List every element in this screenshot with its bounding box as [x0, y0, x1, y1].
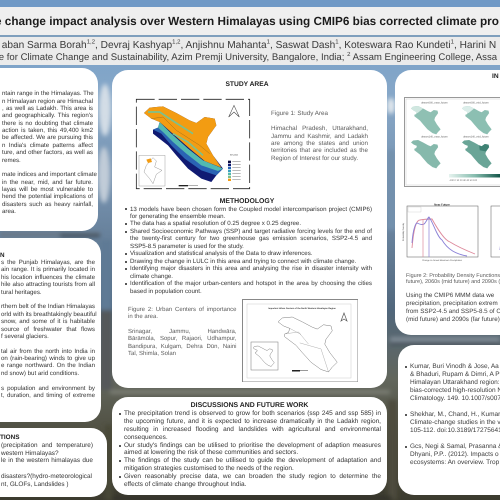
region text: f several glaciers.	[1, 333, 49, 340]
references list: Climate-change studies in the v	[410, 419, 500, 426]
study area elevation map	[136, 98, 250, 190]
region text: his location influences the climate	[1, 274, 95, 281]
figure 1 text: Jammu and Kashmir, and Ladakh	[271, 133, 368, 140]
probability density plot: Probability Density	[402, 222, 405, 241]
authors line: aban Sarma Borah1,2, Devraj Kashyap1,2, Anjishnu Mahanta1, Saswat Dash1, Koteswara Rao Kundeti1, Harini N	[2, 40, 496, 51]
discussion list: The precipitation trend is observed to grow for both scenarios (ssp 245 and ssp 585) in	[124, 410, 381, 417]
probability density plot	[402, 202, 500, 262]
introduction text: hend the potential implications of	[2, 193, 93, 200]
introduction text: layas will be most vulnerable to	[2, 186, 93, 193]
discussion list: The findings of the study can be utilised to guide the development of adaptation and	[124, 457, 381, 464]
introduction text: disasters such as heavy rainfall,	[2, 201, 93, 208]
panel: study area and methodology	[112, 70, 387, 388]
figure 1 text	[271, 110, 368, 162]
results text: Using the CMIP6 MMM data we	[406, 292, 494, 299]
figure 2 text: Srinagar, Jammu, Handwāra,	[128, 329, 236, 335]
methodology list: Visualization and statistical analysis of the Data to draw inferences.	[130, 250, 312, 257]
references list: Shekhar, M., Chand, H., Kumar	[410, 411, 500, 418]
region text: nd snow) but arid conditions.	[1, 370, 79, 377]
authors bar	[0, 37, 500, 65]
region text: on (rain-bearing) winds to give up	[1, 355, 95, 362]
region heading: N	[0, 252, 5, 259]
panel: results	[395, 70, 500, 335]
introduction text: in the near, mid, and far future.	[2, 179, 93, 186]
discussion list: consequences.	[124, 434, 168, 441]
panel: research questions	[0, 428, 107, 497]
heading: results: IN	[492, 72, 499, 80]
discussion list: Given reasonably precise data, we can broaden the study region to determine the	[124, 473, 381, 480]
questions text: le in the western himalayas due	[1, 457, 93, 464]
questions text	[1, 442, 93, 488]
figure 1 text: Himachal Pradesh, Uttarakhand,	[271, 125, 368, 132]
region text: hile also attracting tourists from all	[1, 281, 95, 288]
discussion list: the upcoming future, and it is expected to increase dramatically in the Ladakh region,	[124, 418, 381, 425]
figure 1 text: Figure 1: Study Area	[271, 110, 328, 117]
region text: t, duration, and timing of extreme	[1, 392, 95, 399]
region text: orld with its breathtakingly beautiful	[1, 311, 97, 318]
header: top blue band	[0, 0, 500, 8]
precipitation change maps: ukesm245_mid_future	[463, 136, 489, 138]
precipitation change maps: ukesm585_near_future	[421, 102, 448, 104]
introduction text: mate indices and important climate	[2, 171, 97, 178]
introduction text: n Himalayan region are Himachal	[2, 98, 93, 105]
precipitation change maps: ukesm245_near_future	[421, 136, 448, 138]
methodology list: based in population count.	[130, 288, 202, 295]
affiliations line: e for Climate Change and Sustainability, Azim Premji University, Bangalore, India; 2 Assam Engineering College, Assa	[0, 51, 497, 62]
discussion list: effects of climate change throughout India.	[124, 481, 246, 488]
probability density plot: Change in Annual Maximum Precipitation	[422, 259, 463, 262]
panel: region description	[0, 238, 101, 422]
references list: Dhyani, P.P.. (2012). Impacts o	[410, 451, 499, 458]
results text	[406, 292, 500, 323]
figure 1 text: territories that are included as the	[271, 147, 368, 154]
references list: Kumar, Buri Vinodh & Jose, Aa	[410, 363, 499, 370]
questions text: disasters?(hydro-meteorological	[1, 473, 92, 480]
figure 1 text: Region of Interest for our study.	[271, 155, 358, 162]
urban centers map: Important Urban Centers of the North Western Himalayan Region	[268, 307, 336, 310]
figure 1 text: are among the states and union	[271, 140, 368, 147]
methodology list: SSP5-8.5 parameter is used for the study.	[130, 243, 244, 250]
introduction text	[2, 90, 97, 215]
figure caption: Figure 2: Probability Density Functions	[406, 273, 500, 279]
introduction text: and geographically. This region's	[2, 112, 93, 119]
region text: s population and environment by	[1, 385, 95, 392]
introduction text: ntain range in the Himalayas. The	[2, 90, 94, 97]
header divider	[0, 35, 500, 37]
references list: bias-corrected high-resolution N	[410, 387, 500, 394]
discussion list: Our study's findings can be utilised to prioritise the development of adaption measures	[124, 442, 381, 449]
urban centers map	[242, 299, 358, 382]
results text: precipitation, precipitation extrem	[406, 300, 498, 307]
panel: introduction	[0, 68, 98, 231]
introduction text: remes.	[2, 157, 21, 164]
introduction text: action is taken, this 49,400 km2	[2, 127, 93, 134]
references list: 105-112. doi:10.3189/17275641	[410, 427, 500, 434]
questions text: (precipitation and temperature)	[1, 442, 93, 449]
methodology list: Identification of the major urban-centers and hotspot in the area by choosing the cities	[130, 280, 372, 287]
discussion list: mitigation strategies customised to the needs of the region.	[124, 465, 294, 472]
methodology list: Drawing the change in LULC in this area and trying to connect with climate change.	[130, 258, 356, 265]
region text	[1, 259, 97, 399]
region text: source of freshwater that flows	[1, 326, 95, 333]
questions text: nt, GLOFs, Landslides )	[1, 481, 68, 488]
title: e change impact analysis over Western Himalayas using CMIP6 bias corrected climate pro	[0, 15, 499, 28]
introduction text: ture, and other factors, as well as	[2, 149, 93, 156]
discussion list: resulting in increased flooding and landslides with agricultural and environmental	[124, 426, 381, 433]
figure 2 text	[128, 306, 236, 357]
probability density plot: Near Future	[434, 202, 450, 206]
references list: Climatology. 149. 10.1007/s007	[410, 395, 500, 402]
references list	[405, 363, 500, 466]
heading: study area: STUDY AREA	[225, 81, 269, 88]
title bar	[0, 7, 500, 35]
region text: e range northward. On the Indian	[1, 362, 95, 369]
references list: Himalayan Uttarakhand region:	[410, 379, 500, 386]
panel: references	[398, 345, 500, 495]
methodology list: for generating the ensemble mean.	[130, 213, 225, 220]
region text: tural heritages.	[1, 289, 42, 296]
questions text: western Himalayas?	[1, 450, 59, 457]
results text: (mid future) and 2090s (far future)	[406, 316, 500, 323]
figure 2 text: Tal, Shimla, Solan	[128, 351, 176, 357]
region text: tal air from the north into India in	[1, 348, 95, 355]
questions heading: TIONS	[0, 434, 20, 440]
heading: discussions: DISCUSSIONS AND FUTURE WORK	[191, 402, 308, 409]
introduction text: area.	[2, 208, 16, 215]
methodology list: Shared Socioeconomic Pathways (SSP) and target radiative forcing levels for the end of	[130, 228, 372, 235]
references list: & Bhaduri, Rupam & Dimri, A P	[410, 371, 500, 378]
figure caption	[406, 273, 500, 285]
references list: Gcs, Negi & Samal, Prasanna &	[410, 443, 500, 450]
region text: s the Punjab Himalayas, are the	[1, 259, 95, 266]
panel: discussions and future work	[112, 397, 387, 495]
methodology list: The data has a spatial resolution of 0.25 degree x 0.25 degree.	[130, 220, 301, 227]
figure 2 text: Bārāmūla, Sopur, Rajaori, Udhampur,	[128, 336, 236, 342]
methodology list: Identifying major disasters in this area and analysing the rise in disaster intensity with	[130, 265, 372, 272]
methodology list: the twenty-first century for two greenhouse gas emission scenarios, SSP2-4.5 and	[130, 235, 372, 242]
precipitation change maps	[404, 97, 500, 187]
introduction text: be affected. We are pursuing this	[2, 134, 93, 141]
introduction text: n India's climate patterns affect	[2, 142, 93, 149]
region text: ain range. It is primarily located in	[1, 266, 95, 273]
methodology list	[125, 206, 372, 295]
figure caption: future), 2060s (mid future) and 2090s (	[406, 279, 500, 285]
results text: from SSP2-4.5 and SSP5-8.5 of C	[406, 308, 500, 315]
methodology list: climate change.	[130, 273, 173, 280]
methodology list: 13 models have been chosen form the Coupled model intercomparison project (CMIP6)	[130, 206, 372, 212]
discussion list: aimed at lowering the risk of these communities and sectors.	[124, 449, 298, 456]
references list: ecosystems: An overview. Trop	[410, 459, 499, 466]
discussion list	[119, 410, 381, 488]
region text: snow, and some of it is habitable	[1, 318, 95, 325]
figure 2 text: in the area.	[128, 314, 158, 320]
figure 2 text: Figure 2: Urban Centers of importance	[128, 307, 236, 313]
precipitation change maps: -100 0 10 20 30 40 50 100	[449, 179, 478, 182]
precipitation change maps: ukesm585_mid_future	[463, 102, 489, 104]
introduction text: , as well as Ladakh. This area is	[2, 105, 93, 112]
heading: methodology: METHODOLOGY	[220, 198, 274, 205]
study area elevation map: Elevation	[230, 154, 238, 156]
introduction text: there is no doubting that climate	[2, 120, 93, 127]
region text: rthern belt of the Indian Himalayas	[1, 303, 95, 310]
figure 2 text: Bandipura, Kulgam, Dehra Dūn, Naini	[128, 344, 236, 350]
